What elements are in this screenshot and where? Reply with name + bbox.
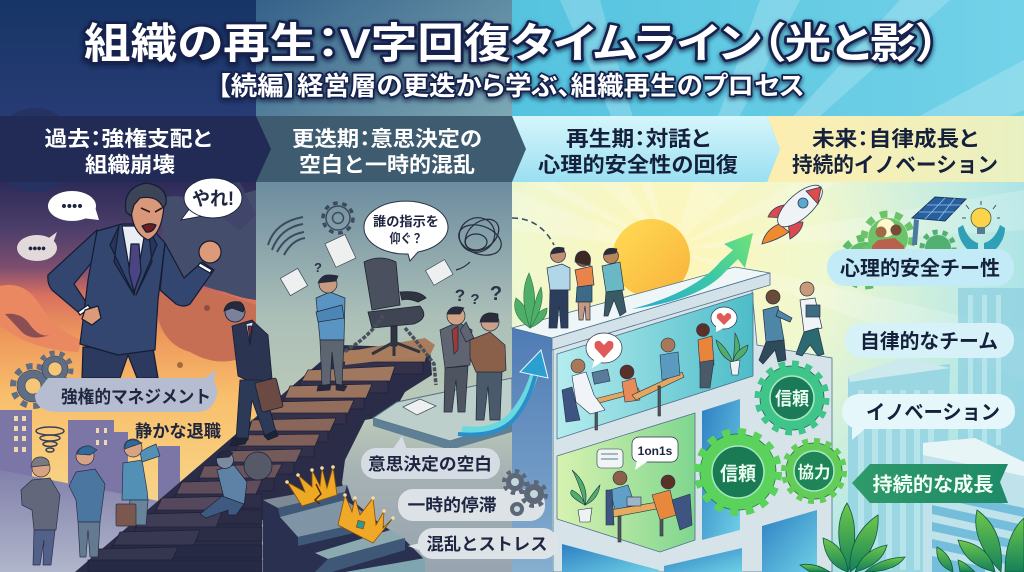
question marks: ? <box>455 286 465 305</box>
label: authoritarian management <box>35 370 217 412</box>
confused man in grey suit <box>440 307 474 412</box>
icon: tangled scribble <box>453 211 505 270</box>
header: past phase: 過去：強権支配と <box>44 128 212 151</box>
lower office floor <box>571 470 692 542</box>
label: autonomous team <box>845 323 1014 358</box>
sun <box>612 219 690 297</box>
speech bubble: whose orders: 仰ぐ？ <box>390 231 422 246</box>
lower platform <box>373 378 512 450</box>
broken crown <box>285 465 337 506</box>
label: confusion and stress: 混乱とストレス <box>426 535 548 554</box>
icon: outline gear <box>323 203 353 233</box>
empty chained chair <box>344 258 436 385</box>
header: past phase: 組織崩壊 <box>85 154 175 177</box>
speech bubble: silence large: ・・・・ <box>56 199 88 216</box>
label: quiet quitting: 静かな退職 <box>135 422 221 441</box>
header: future phase: 未来：自律成長と <box>812 127 978 151</box>
speech bubble: silence small <box>17 232 57 261</box>
scattered papers <box>280 234 453 296</box>
speech bubble: yare: やれ! <box>192 188 234 210</box>
label: psychological safety: 心理的安全チー性 <box>840 257 1000 280</box>
man in brown jacket <box>470 313 506 420</box>
speech bubble: whose orders <box>364 201 448 261</box>
header: regeneration phase: 再生期：対話と <box>566 128 710 151</box>
building <box>512 267 832 572</box>
header: future phase: 持続的イノベーション <box>792 154 998 177</box>
plants foreground <box>800 503 1024 572</box>
label: temporary stagnation: 一時的停滞 <box>408 495 496 515</box>
banner: sustainable growth <box>852 464 1008 503</box>
fallen crown <box>338 493 395 543</box>
icon: gears <box>13 353 71 406</box>
speech bubble: silence small: ・・・・ <box>23 241 51 258</box>
upper office floor <box>562 324 748 430</box>
header: regeneration phase: 心理的安全性の回復 <box>538 154 738 177</box>
question marks: ? <box>470 291 480 308</box>
label: authoritarian management: 強権的マネジメント <box>61 387 211 407</box>
label: temporary stagnation <box>398 489 545 521</box>
speech bubble: small chat <box>597 449 623 468</box>
label: innovation: イノベーション <box>866 402 1000 424</box>
speech bubble: heart right <box>711 307 737 332</box>
rooftop team <box>547 247 626 328</box>
header: past phase <box>0 116 271 182</box>
rocket <box>762 178 829 244</box>
rising green arrow <box>632 233 753 309</box>
header: transition phase: 空白と一時的混乱 <box>299 154 475 177</box>
header: regeneration phase <box>512 116 780 182</box>
background skyscrapers <box>848 288 1024 572</box>
right-hand lower steps <box>263 485 425 572</box>
header: transition phase: 更迭期：意思決定の <box>292 128 482 151</box>
handshake pair <box>759 282 824 364</box>
worker 2 <box>69 446 105 557</box>
question marks <box>314 260 502 308</box>
banner: sustainable growth: 持続的な成長 <box>872 473 994 496</box>
icon: swirl <box>268 217 305 255</box>
speech bubble: heart left <box>586 333 622 368</box>
gear: trust lower <box>698 432 778 512</box>
label: decision vacuum <box>361 436 500 479</box>
subtitle: 【続編】経営層の更迭から学ぶ、組織再生のプロセス <box>218 71 804 101</box>
speech bubble: yare <box>181 178 242 220</box>
worker 1 <box>21 457 60 565</box>
worker 3 with briefcase <box>116 439 160 526</box>
sitting employee and wrecking ball <box>200 451 272 518</box>
gear: cooperation <box>784 441 844 501</box>
question marks: ? <box>314 260 322 275</box>
future icon cluster <box>841 197 1005 286</box>
question marks: ? <box>490 283 502 305</box>
header: transition phase <box>256 116 526 182</box>
smoke clouds <box>0 182 256 368</box>
speech bubble: whose orders: 誰の指示を <box>373 214 439 229</box>
speech bubble: 1on1s <box>632 437 678 470</box>
man with crossed arms <box>316 275 347 391</box>
descending employee with briefcase <box>224 302 283 446</box>
gear: trust upper <box>758 364 826 432</box>
label: innovation <box>842 394 1015 440</box>
label: autonomous team: 自律的なチーム <box>860 330 998 353</box>
gear: cooperation: 協力 <box>798 463 830 482</box>
speech bubble: silence large <box>48 191 99 221</box>
skyline <box>0 410 256 572</box>
header: future phase <box>767 116 1024 182</box>
small gears <box>504 471 546 516</box>
icon: tornado <box>36 427 64 452</box>
gear: trust lower: 信頼 <box>720 463 756 485</box>
plant on roof <box>515 273 547 328</box>
angry boss <box>48 183 221 378</box>
label: confusion and stress <box>408 528 558 559</box>
staircase <box>75 345 432 572</box>
blue recovery arrow <box>458 350 548 435</box>
label: psychological safety <box>827 249 1014 286</box>
speech bubble: 1on1s: 1on1s <box>638 444 673 458</box>
label: decision vacuum: 意思決定の空白 <box>368 455 492 474</box>
dashed path decoration <box>512 218 554 245</box>
title: 組織の再生：V字回復タイムライン（光と影） <box>84 20 940 67</box>
gear: trust upper: 信頼 <box>775 389 809 409</box>
